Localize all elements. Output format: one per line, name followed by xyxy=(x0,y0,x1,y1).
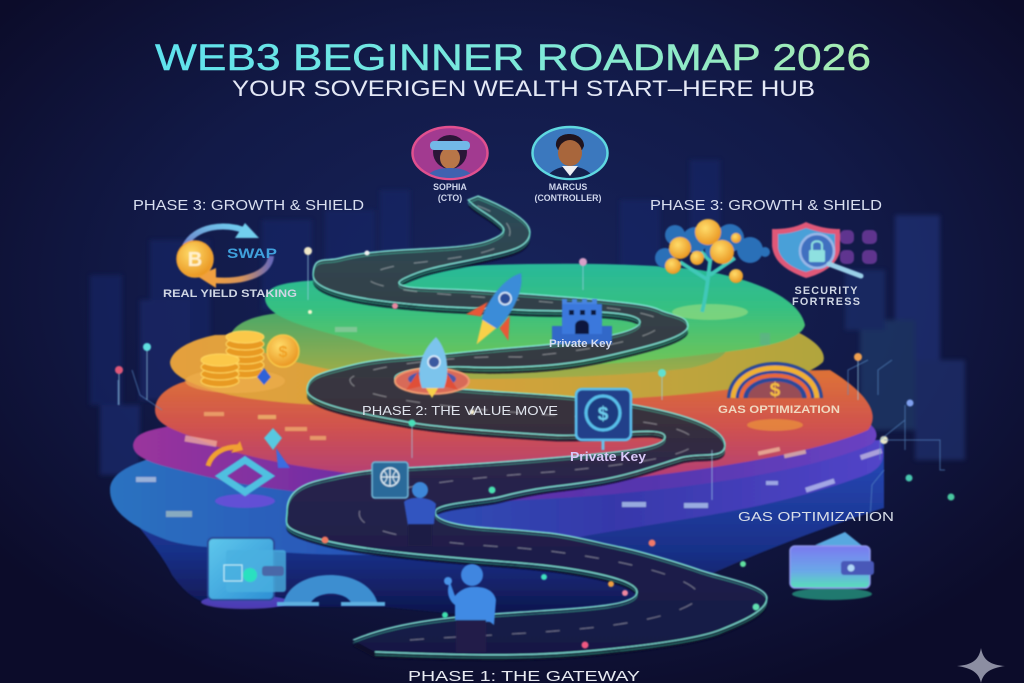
icon: dollar sign board: $ xyxy=(598,404,609,425)
road surface xyxy=(286,196,767,655)
avatar: Marcus: (CONTROLLER) xyxy=(535,193,602,203)
icon: coin tree xyxy=(655,219,770,320)
title: WEB3 BEGINNER ROADMAP 2026 xyxy=(155,37,871,78)
label: swap: SWAP xyxy=(227,245,277,261)
label: gas optimization lower: GAS OPTIMIZATION xyxy=(738,509,894,524)
circuit traces xyxy=(118,360,945,520)
road lane dashes xyxy=(350,205,700,640)
tier: amber deck xyxy=(170,325,824,407)
icon: corner sparkle xyxy=(957,648,1005,683)
icon: wallet right xyxy=(790,532,874,600)
avatar: Marcus: MARCUS xyxy=(549,182,587,192)
avatar: Sophia: (CTO) xyxy=(438,193,462,203)
label: real yield staking: REAL YIELD STAKING xyxy=(163,288,297,300)
heading: phase 3 left: PHASE 3: GROWTH & SHIELD xyxy=(133,198,364,214)
label: security fortress: FORTRESS xyxy=(792,296,860,308)
avatar: Marcus xyxy=(532,127,608,203)
tier: blue deck xyxy=(110,440,883,555)
tiered landscape xyxy=(110,264,884,620)
subtitle: YOUR SOVERIGEN WEALTH START–HERE HUB xyxy=(232,76,815,101)
heading: phase 2: PHASE 2: THE VALUE MOVE xyxy=(362,403,558,418)
avatar: Sophia xyxy=(412,127,488,203)
tier: lower green deck xyxy=(232,312,728,379)
road shadow xyxy=(286,202,767,661)
tier: coral deck xyxy=(155,370,873,488)
label: private key upper: Private Key xyxy=(549,338,613,350)
icon: gateway arch xyxy=(277,575,385,606)
label: private key lower: Private Key xyxy=(570,450,646,464)
icon: dollar sign board xyxy=(576,389,631,450)
icon: diamond swap xyxy=(208,428,290,508)
icon: gold coin stacks: $ xyxy=(279,344,288,361)
icon: swap cycle xyxy=(177,223,271,288)
icon: gas gauge: $ xyxy=(770,380,781,401)
icon: gas gauge xyxy=(727,362,823,431)
icon: rocket upper xyxy=(455,260,542,358)
icon: swap cycle: B xyxy=(188,249,202,271)
icon: wallet left xyxy=(201,538,289,609)
winding road xyxy=(286,196,767,661)
lamps and nodes xyxy=(115,247,954,648)
tier: top green deck xyxy=(265,264,805,365)
heading: phase 3 right: PHASE 3: GROWTH & SHIELD xyxy=(650,198,882,214)
icon: rocket lower xyxy=(395,337,469,398)
tier: purple deck xyxy=(133,420,877,501)
road secondary edge xyxy=(286,199,767,658)
label: gas optimization upper: GAS OPTIMIZATION xyxy=(718,404,840,416)
city skyline xyxy=(90,160,965,475)
tier: blue base wall xyxy=(125,440,884,620)
avatar: Sophia: SOPHIA xyxy=(433,182,468,192)
icon: castle private key xyxy=(552,299,612,344)
icon: waving person xyxy=(444,564,496,652)
label: security fortress: SECURITY xyxy=(794,285,858,297)
deck blocks xyxy=(136,327,882,517)
icon: globe sign with person xyxy=(372,462,436,546)
icon: gold coin stacks xyxy=(185,331,299,393)
icon: security shield xyxy=(772,222,877,278)
